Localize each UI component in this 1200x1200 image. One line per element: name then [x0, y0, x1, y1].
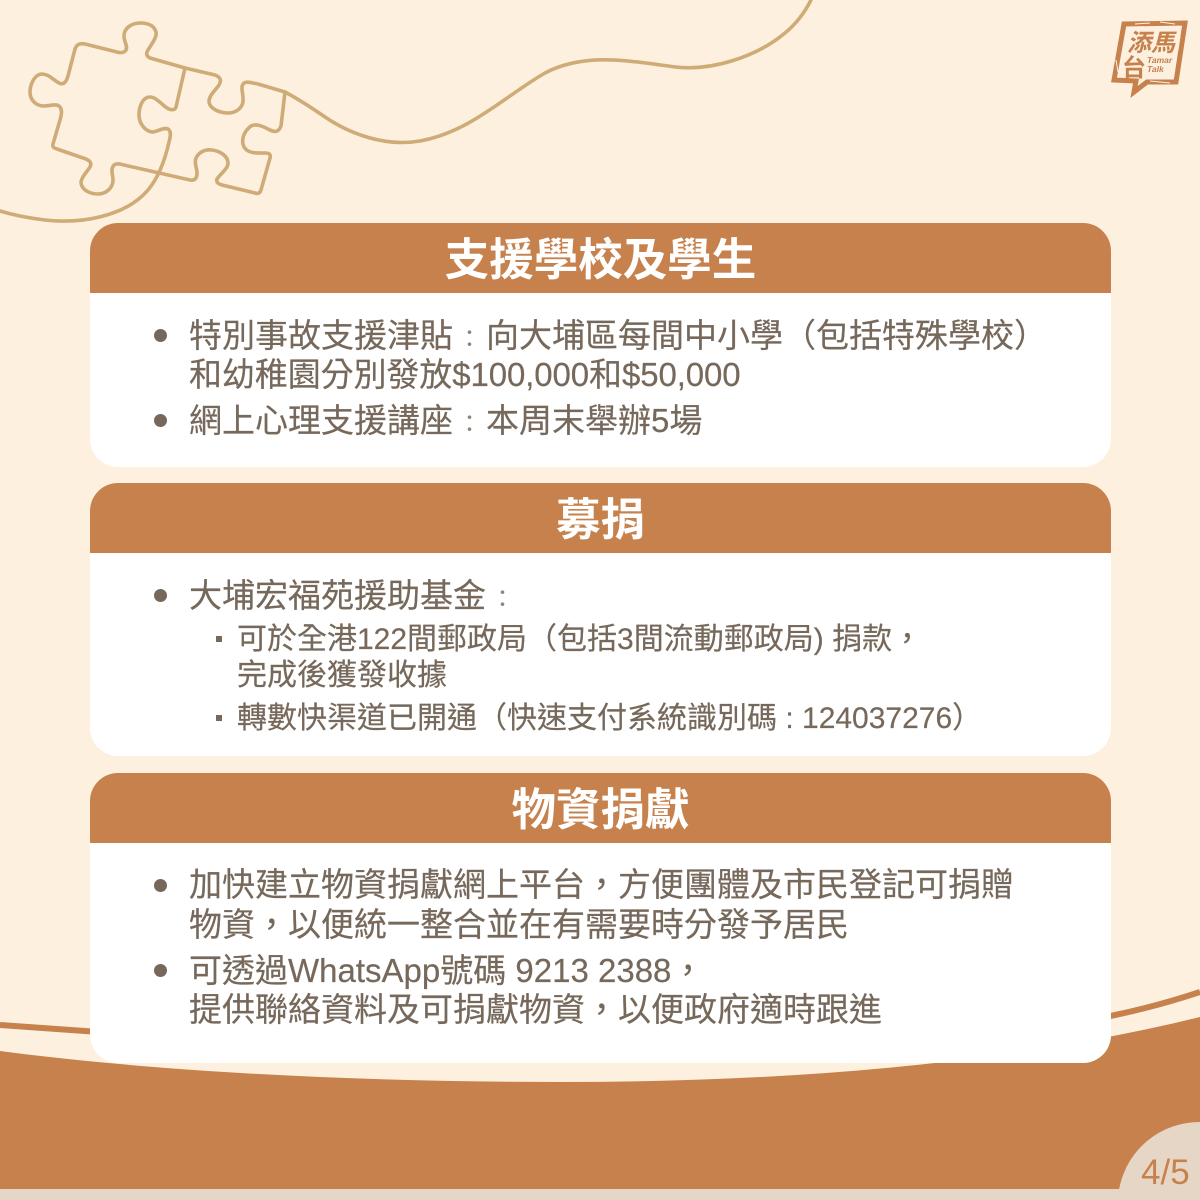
text block: 網上心理支援講座 本周末舉辦5場: [189, 402, 702, 439]
text block: 可於全港122間郵政局（包括3間流動郵政局) 捐款，: [237, 623, 922, 656]
heading: 支援學校及學生: [445, 236, 756, 285]
panel: 支援學校及學生: [90, 223, 1111, 467]
sub bullet: [216, 636, 222, 642]
text line: 和幼稚園分別發放$100,000和$50,000: [189, 356, 741, 393]
text line: 物資，以便統一整合並在有需要時分發予居民: [189, 906, 849, 943]
text line: 完成後獲發收據: [237, 659, 447, 692]
text block: ：: [490, 586, 514, 613]
logo text: 台: [1122, 54, 1146, 82]
bullet: [154, 414, 167, 427]
panel: 募捐: [90, 483, 1111, 756]
puzzle outline: [0, 0, 811, 221]
footer brown wave: [0, 1017, 1200, 1200]
heading: [90, 773, 1111, 843]
footer curve line right: [1108, 992, 1200, 1016]
text block: 轉數快渠道已開通（快速支付系統識別碼 : 124037276）: [237, 702, 982, 735]
footer curve line left: [0, 1025, 92, 1032]
panel: 物資捐獻: [90, 773, 1111, 1063]
text line: 提供聯絡資料及可捐獻物資，以便政府適時跟進: [189, 991, 882, 1028]
text block: ：: [458, 326, 482, 353]
heading: 物資捐獻: [511, 786, 690, 835]
logo text: Talk: [1147, 64, 1165, 74]
bubble outline: [1114, 23, 1185, 92]
panel text: supplies: [154, 866, 1014, 1028]
heading: 募捐: [556, 496, 645, 545]
text block: 大埔宏福苑援助基金: [189, 577, 486, 614]
logo distress marks: [1116, 22, 1180, 83]
text block: ：: [458, 411, 482, 438]
logo text: 添馬: [1127, 30, 1177, 57]
heading: [90, 223, 1111, 293]
logo: Tamar Talk speech bubble: [1111, 20, 1188, 98]
bullet: [154, 964, 167, 977]
bullet: [154, 589, 167, 602]
text block: 特別事故支援津貼 向大埔區每間中小學（包括特殊學校）: [189, 317, 1047, 354]
text block: 加快建立物資捐獻網上平台，方便團體及市民登記可捐贈: [189, 866, 1014, 903]
logo text: [1122, 30, 1177, 82]
bullet: [154, 879, 167, 892]
page badge background: [1119, 1122, 1200, 1190]
logo text: Tamar: [1147, 55, 1173, 65]
panel text: donation: [154, 577, 982, 735]
bottom strip: [0, 1189, 1200, 1200]
sub bullet: [216, 715, 222, 721]
page number: 4/5: [1141, 1153, 1190, 1192]
text block: 可透過WhatsApp號碼 9213 2388，: [189, 952, 704, 989]
heading: [90, 483, 1111, 553]
panel text: school support: [154, 317, 1047, 439]
bullet: [154, 329, 167, 342]
